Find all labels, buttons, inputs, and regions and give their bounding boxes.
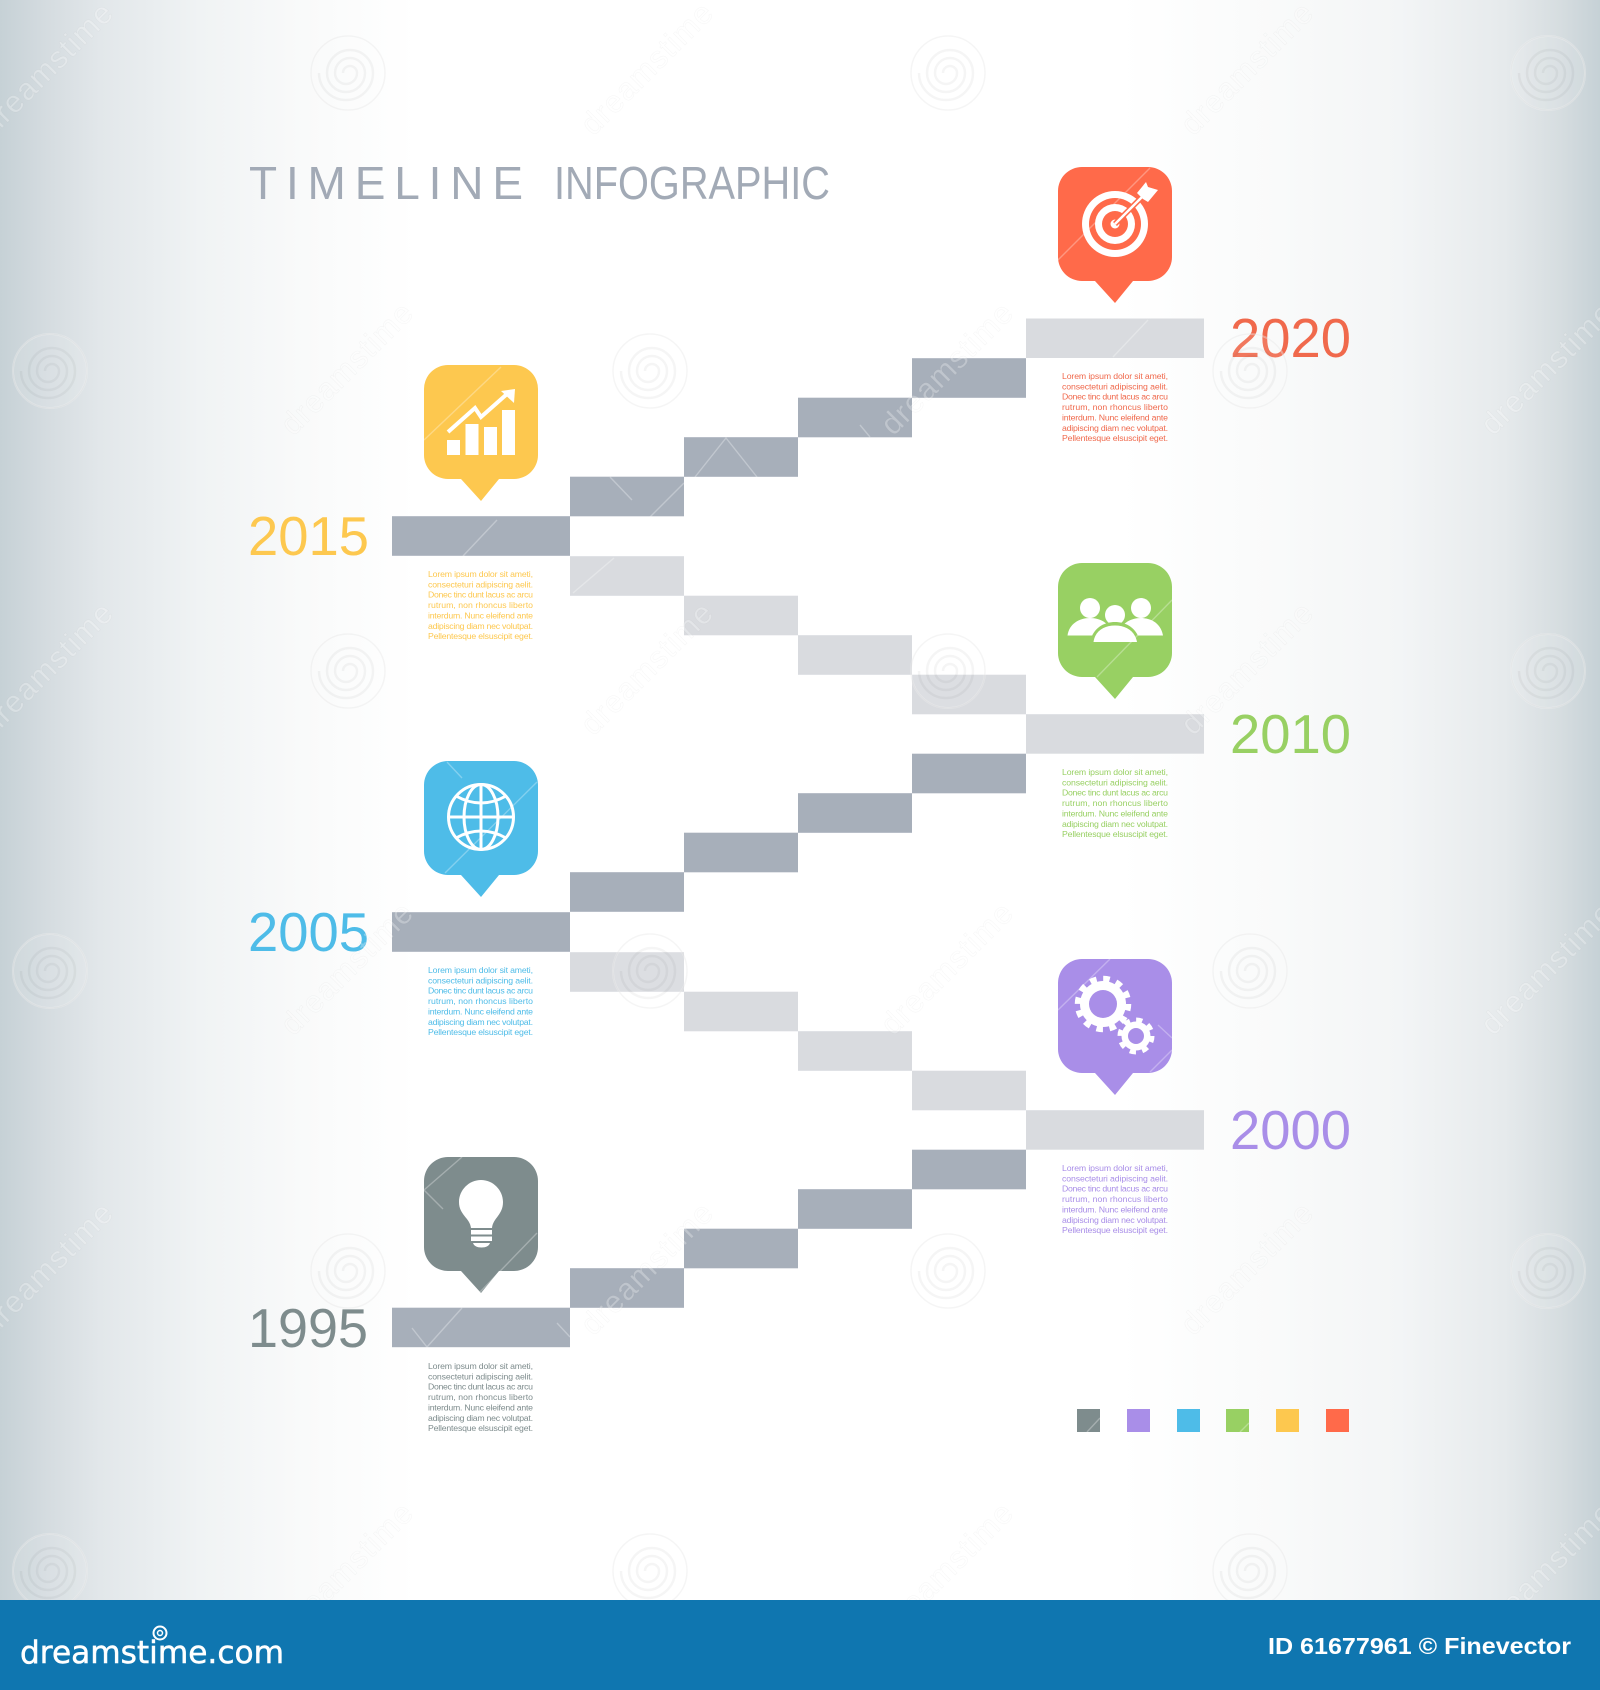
stair: 2010 to 2015 [570,556,1204,754]
watermark wordmarks: dreamstime [1173,595,1320,742]
year: 2005: 2005 [248,901,369,963]
text block: 2015: Lorem ipsum dolor sit ameti, [428,569,533,579]
text block: 2010: Lorem ipsum dolor sit ameti, [1062,767,1168,777]
text block: 2015: Donec tinc dunt lacus ac arcu [428,590,533,600]
text block: 2010: Pellentesque elsuscipit eget. [1062,829,1168,839]
text block: 2020: Lorem ipsum dolor sit ameti, [1062,371,1168,381]
text block: 2015: adipiscing diam nec volutpat. [428,621,533,631]
text block: 2020: interdum. Nunc eleifend ante [1062,412,1168,422]
text block: 2010: consecteturi adipiscing aelit. [1062,777,1168,787]
text block: 2015: consecteturi adipiscing aelit. [428,579,533,589]
stair: 2005 to 2010 [392,754,1026,952]
text block: 1995 [428,1361,533,1433]
pin: 2000 [1058,959,1172,1095]
watermark wordmarks: dreamstime [873,1495,1020,1642]
icon: growth chart [447,389,515,455]
icon: target with arrow [1082,182,1158,257]
text block: 2000: Lorem ipsum dolor sit ameti, [1062,1163,1168,1173]
icon: globe [448,784,514,850]
stair: 1995 to 2000 [392,1150,1026,1347]
footer credit: ID 61677961 © Finevector [1268,1633,1571,1659]
milestone: 2005 [248,761,538,1037]
text block: 1995: consecteturi adipiscing aelit. [428,1371,533,1381]
footer logo: dreamstime.com: dreamstime.com [20,1635,284,1671]
text block: 2010 [1062,767,1168,839]
icon: light bulb [459,1180,503,1248]
text block: 2005: consecteturi adipiscing aelit. [428,975,533,985]
text block: 2015: interdum. Nunc eleifend ante [428,610,533,620]
text block: 2010: interdum. Nunc eleifend ante [1062,808,1168,818]
pin: 2005 [424,761,538,897]
text block: 1995: Lorem ipsum dolor sit ameti, [428,1361,533,1371]
milestone: 1995 [248,1157,538,1433]
text block: 2010: rutrum, non rhoncus liberto [1062,798,1168,808]
watermark wordmarks: dreamstime [573,1195,720,1342]
stair: 2020 top bar [1026,318,1204,358]
text block: 2020: adipiscing diam nec volutpat. [1062,423,1168,433]
watermark wordmarks: dreamstime [873,895,1020,1042]
milestone: 2010 [1058,563,1351,839]
text block: 2000: adipiscing diam nec volutpat. [1062,1215,1168,1225]
watermark diagonal lines [412,168,1249,1432]
stair: 2000 to 2005 [570,952,1204,1150]
pin: 1995 [424,1157,538,1293]
text block: 2000: rutrum, non rhoncus liberto [1062,1194,1168,1204]
text block: 2005: interdum. Nunc eleifend ante [428,1006,533,1016]
text block: 2015 [428,569,533,641]
stair: 2015 to 2020 [392,358,1026,556]
year: 2020: 2020 [1230,307,1351,369]
text block: 2010: Donec tinc dunt lacus ac arcu [1062,788,1168,798]
year: 1995: 1995 [248,1297,368,1359]
text block: 2020: Donec tinc dunt lacus ac arcu [1062,392,1168,402]
text block: 2005: adipiscing diam nec volutpat. [428,1017,533,1027]
text block: 2000: Donec tinc dunt lacus ac arcu [1062,1184,1168,1194]
text block: 2010: adipiscing diam nec volutpat. [1062,819,1168,829]
text block: 2005: Donec tinc dunt lacus ac arcu [428,986,533,996]
text block: 2015: Pellentesque elsuscipit eget. [428,631,533,641]
title [249,157,830,209]
text block: 1995: rutrum, non rhoncus liberto [428,1392,533,1402]
milestone: 2000 [1058,959,1351,1235]
title: TIMELINE [249,157,523,209]
milestone: 2015 [248,365,538,641]
footer banner [0,1600,1600,1690]
icon: people group [1068,598,1163,643]
text block: 2020: rutrum, non rhoncus liberto [1062,402,1168,412]
title: INFOGRAPHIC [554,157,830,209]
text block: 2005: rutrum, non rhoncus liberto [428,996,533,1006]
watermark wordmarks: dreamstime [573,595,720,742]
pin: 2010 [1058,563,1172,699]
pin: 2020 [1058,167,1172,303]
text block: 2000 [1062,1163,1168,1235]
text block: 2000: consecteturi adipiscing aelit. [1062,1173,1168,1183]
text block: 1995: interdum. Nunc eleifend ante [428,1402,533,1412]
text block: 2005: Lorem ipsum dolor sit ameti, [428,965,533,975]
watermark wordmarks: dreamstime [273,1495,420,1642]
icon: gears [1078,979,1154,1054]
text block: 1995: Donec tinc dunt lacus ac arcu [428,1382,533,1392]
text block: 2020 [1062,371,1168,443]
text block: 2020: consecteturi adipiscing aelit. [1062,381,1168,391]
watermark wordmarks: dreamstime [873,295,1020,442]
watermark wordmarks: dreamstime [1173,1195,1320,1342]
watermark wordmarks: dreamstime [273,295,420,442]
year: 2015: 2015 [248,505,369,567]
year: 2000: 2000 [1230,1099,1351,1161]
legend colour squares [1077,1409,1349,1432]
text block: 2000: interdum. Nunc eleifend ante [1062,1204,1168,1214]
year: 2010: 2010 [1230,703,1351,765]
pin: 2015 [424,365,538,501]
text block: 2005: Pellentesque elsuscipit eget. [428,1027,533,1037]
text block: 2005 [428,965,533,1037]
text block: 2015: rutrum, non rhoncus liberto [428,600,533,610]
text block: 1995: Pellentesque elsuscipit eget. [428,1423,533,1433]
text block: 1995: adipiscing diam nec volutpat. [428,1413,533,1423]
watermark wordmarks: dreamstime [273,895,420,1042]
text block: 2020: Pellentesque elsuscipit eget. [1062,433,1168,443]
milestone: 2020 [1058,167,1351,443]
text block: 2000: Pellentesque elsuscipit eget. [1062,1225,1168,1235]
